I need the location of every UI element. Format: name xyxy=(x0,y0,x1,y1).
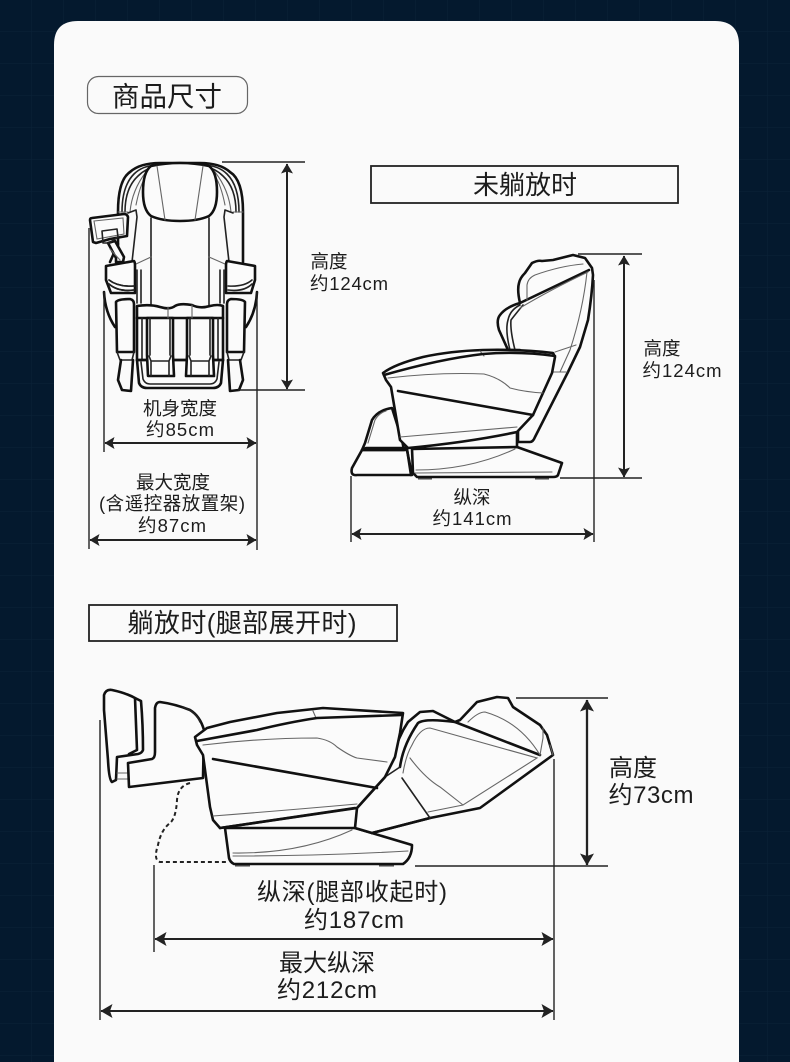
dimension: body width: 机身宽度 xyxy=(143,398,217,419)
icon: remote tablet xyxy=(90,214,128,262)
dimension: side depth: 约141cm xyxy=(432,508,512,529)
dimension: side height: 高度 xyxy=(643,338,681,359)
heading: product dimensions xyxy=(88,76,248,114)
dimension: maximum width: 最大宽度 xyxy=(136,472,210,493)
heading: product dimensions: 商品尺寸 xyxy=(112,81,222,112)
dimension: maximum depth xyxy=(100,720,553,1020)
dimension: reclined height: 约73cm xyxy=(608,782,694,809)
dimension: depth legs stowed: 纵深(腿部收起时) xyxy=(257,879,447,906)
side view chair upright xyxy=(352,255,593,480)
dimension: maximum width xyxy=(89,228,256,549)
front view chair xyxy=(90,163,257,391)
dimension: depth legs stowed: 约187cm xyxy=(304,907,404,934)
dimension: front height xyxy=(222,162,388,390)
dimension: reclined height: 高度 xyxy=(609,755,657,782)
dimension: depth legs stowed xyxy=(154,759,554,1020)
dotted stowed leg outline xyxy=(156,783,228,862)
dimension: reclined height xyxy=(415,698,694,866)
dimension: side depth xyxy=(351,280,594,542)
heading: not reclined: 未躺放时 xyxy=(473,170,577,200)
heading: reclined with legs extended: 躺放时(腿部展开时) xyxy=(128,608,356,638)
dimension: side depth: 纵深 xyxy=(453,487,491,508)
dimension: front height: 约124cm xyxy=(310,273,388,294)
dimension: maximum width: 约87cm xyxy=(138,515,206,536)
dimension: side height: 约124cm xyxy=(642,360,722,381)
dimension: body width: 约85cm xyxy=(146,419,214,440)
reclined chair xyxy=(104,690,553,866)
dimension: maximum depth: 最大纵深 xyxy=(279,950,375,977)
dimension: front height: 高度 xyxy=(310,251,348,272)
heading: reclined with legs extended xyxy=(89,605,397,641)
dimension: maximum width: (含遥控器放置架) xyxy=(99,493,245,514)
dimension: side height xyxy=(560,254,722,478)
dimension: body width xyxy=(104,292,257,550)
heading: not reclined xyxy=(371,166,678,203)
dimension: maximum depth: 约212cm xyxy=(277,977,377,1004)
